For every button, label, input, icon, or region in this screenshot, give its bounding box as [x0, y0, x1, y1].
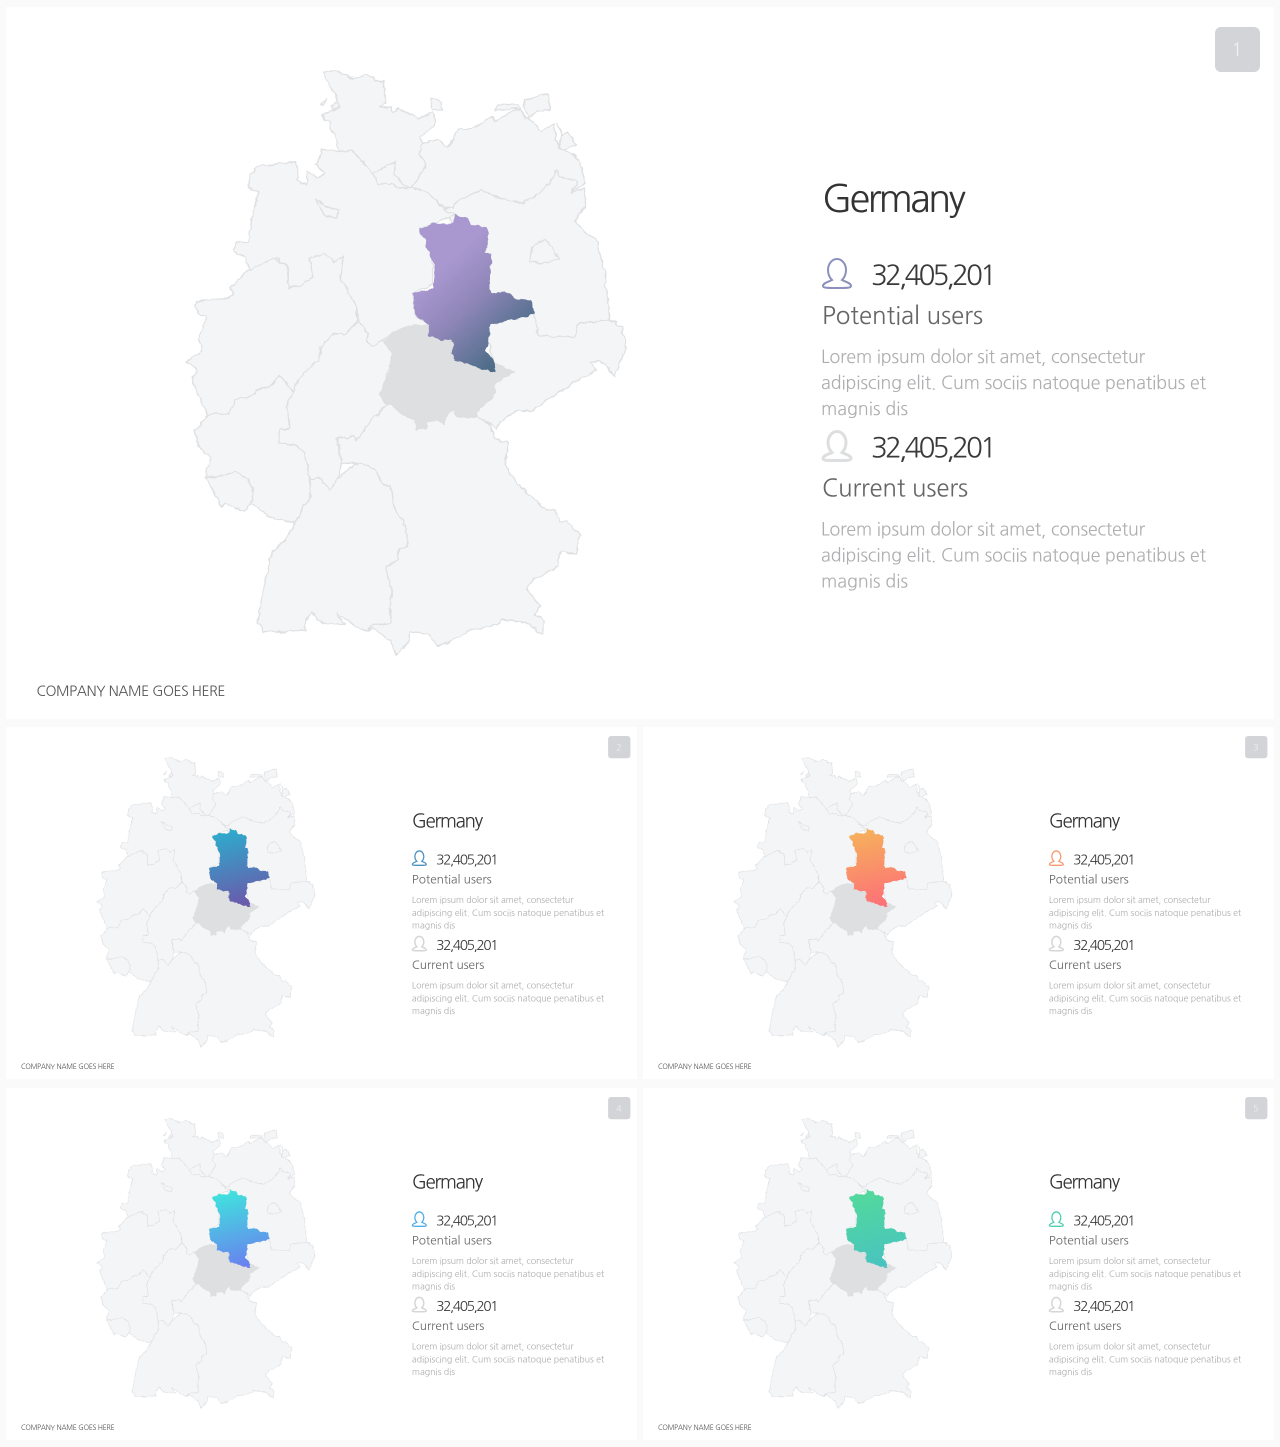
stat: potential users: Potential users — [1049, 874, 1129, 886]
stat: potential users: magnis dis — [412, 922, 455, 931]
stat: current users: Current users — [822, 476, 968, 500]
stat: current users: magnis dis — [1049, 1007, 1092, 1016]
map: Germany with Saxony-Anhalt highlighted — [187, 71, 627, 655]
heading: Germany — [1049, 812, 1121, 831]
stat: current users: adipiscing elit. Cum sociis natoque penatibus et — [1049, 1355, 1242, 1364]
slide number badge — [1245, 1097, 1267, 1119]
stat: current users — [412, 936, 605, 1016]
stat: potential users: Lorem ipsum dolor sit amet, consectetur — [821, 348, 1145, 366]
stat: potential users: adipiscing elit. Cum sociis natoque penatibus et — [821, 374, 1206, 392]
stat: current users: 32,405,201 — [1073, 938, 1136, 952]
slide number badge — [608, 736, 630, 758]
slide number badge — [1245, 736, 1267, 758]
slide number badge: 3 — [1253, 743, 1259, 752]
stat: current users: 32,405,201 — [1073, 1299, 1136, 1313]
company name: COMPANY NAME GOES HERE — [36, 685, 226, 699]
stat: potential users: Potential users — [412, 1235, 492, 1247]
stat: potential users — [1049, 1212, 1242, 1292]
stat: potential users: magnis dis — [821, 400, 908, 418]
stat: current users: magnis dis — [412, 1007, 455, 1016]
stat: potential users: Potential users — [822, 304, 983, 328]
stat: current users: adipiscing elit. Cum sociis natoque penatibus et — [412, 1355, 605, 1364]
stat: current users: 32,405,201 — [871, 434, 997, 462]
stat: current users: 32,405,201 — [436, 1299, 499, 1313]
heading: Germany — [412, 1173, 484, 1192]
slide number badge: 1 — [1232, 41, 1242, 59]
stat: potential users: 32,405,201 — [436, 852, 499, 866]
stat: potential users: adipiscing elit. Cum sociis natoque penatibus et — [1049, 1270, 1242, 1279]
stat: current users: Lorem ipsum dolor sit amet, consectetur — [1049, 981, 1211, 990]
stat: potential users: magnis dis — [1049, 922, 1092, 931]
stat: current users: 32,405,201 — [436, 938, 499, 952]
stat: potential users: Lorem ipsum dolor sit amet, consectetur — [412, 896, 574, 905]
stat: current users — [1049, 1297, 1242, 1377]
company name: COMPANY NAME GOES HERE — [21, 1063, 115, 1070]
stat: current users — [821, 432, 1206, 590]
stat: potential users: 32,405,201 — [436, 1213, 499, 1227]
panel: slide 4 — [6, 1088, 637, 1440]
heading: Germany — [822, 180, 966, 218]
panel: slide 5 — [643, 1088, 1274, 1440]
heading: Germany — [1049, 1173, 1121, 1192]
stat: potential users: Lorem ipsum dolor sit amet, consectetur — [1049, 1257, 1211, 1266]
stat: current users: magnis dis — [412, 1368, 455, 1377]
stat: potential users: Potential users — [1049, 1235, 1129, 1247]
stat: potential users: 32,405,201 — [871, 262, 997, 290]
map: blue-violet highlight — [97, 758, 315, 1047]
slide number badge: 5 — [1253, 1104, 1259, 1113]
stat: potential users: magnis dis — [412, 1283, 455, 1292]
stat: potential users — [412, 851, 605, 931]
stat: current users: adipiscing elit. Cum sociis natoque penatibus et — [412, 994, 605, 1003]
stat: potential users — [412, 1212, 605, 1292]
stat: potential users — [821, 259, 1206, 418]
slide number badge — [608, 1097, 630, 1119]
stat: current users: Lorem ipsum dolor sit amet, consectetur — [1049, 1342, 1211, 1351]
stat: current users: adipiscing elit. Cum sociis natoque penatibus et — [821, 546, 1206, 564]
stat: potential users — [1049, 851, 1242, 931]
map: orange highlight — [734, 758, 952, 1047]
stat: potential users: 32,405,201 — [1073, 852, 1136, 866]
stat: current users: Current users — [1049, 959, 1121, 971]
stat: potential users: Lorem ipsum dolor sit amet, consectetur — [1049, 896, 1211, 905]
stat: potential users: adipiscing elit. Cum sociis natoque penatibus et — [412, 1270, 605, 1279]
stat: current users: Lorem ipsum dolor sit amet, consectetur — [412, 981, 574, 990]
stat: potential users: Potential users — [412, 874, 492, 886]
stat: potential users: 32,405,201 — [1073, 1213, 1136, 1227]
slide number badge: 4 — [616, 1104, 622, 1113]
panel: slide 3 — [643, 727, 1274, 1079]
stat: current users: magnis dis — [1049, 1368, 1092, 1377]
map: cyan highlight — [97, 1119, 315, 1408]
panel: slide 1 — [6, 7, 1274, 719]
stat: current users — [412, 1297, 605, 1377]
stat: current users: magnis dis — [821, 572, 908, 590]
stat: current users: Current users — [412, 959, 484, 971]
stat: potential users: adipiscing elit. Cum sociis natoque penatibus et — [412, 909, 605, 918]
stat: potential users: Lorem ipsum dolor sit amet, consectetur — [412, 1257, 574, 1266]
stat: current users: adipiscing elit. Cum sociis natoque penatibus et — [1049, 994, 1242, 1003]
map: green highlight — [734, 1119, 952, 1408]
panel: slide 2 — [6, 727, 637, 1079]
stat: current users — [1049, 936, 1242, 1016]
stat: potential users: magnis dis — [1049, 1283, 1092, 1292]
company name: COMPANY NAME GOES HERE — [21, 1424, 115, 1431]
slide number badge — [1215, 27, 1260, 72]
company name: COMPANY NAME GOES HERE — [658, 1424, 752, 1431]
stat: current users: Lorem ipsum dolor sit amet, consectetur — [821, 520, 1145, 538]
slide number badge: 2 — [616, 743, 622, 752]
heading: Germany — [412, 812, 484, 831]
stat: potential users: adipiscing elit. Cum sociis natoque penatibus et — [1049, 909, 1242, 918]
company name: COMPANY NAME GOES HERE — [658, 1063, 752, 1070]
stat: current users: Current users — [1049, 1320, 1121, 1332]
stat: current users: Lorem ipsum dolor sit amet, consectetur — [412, 1342, 574, 1351]
stat: current users: Current users — [412, 1320, 484, 1332]
